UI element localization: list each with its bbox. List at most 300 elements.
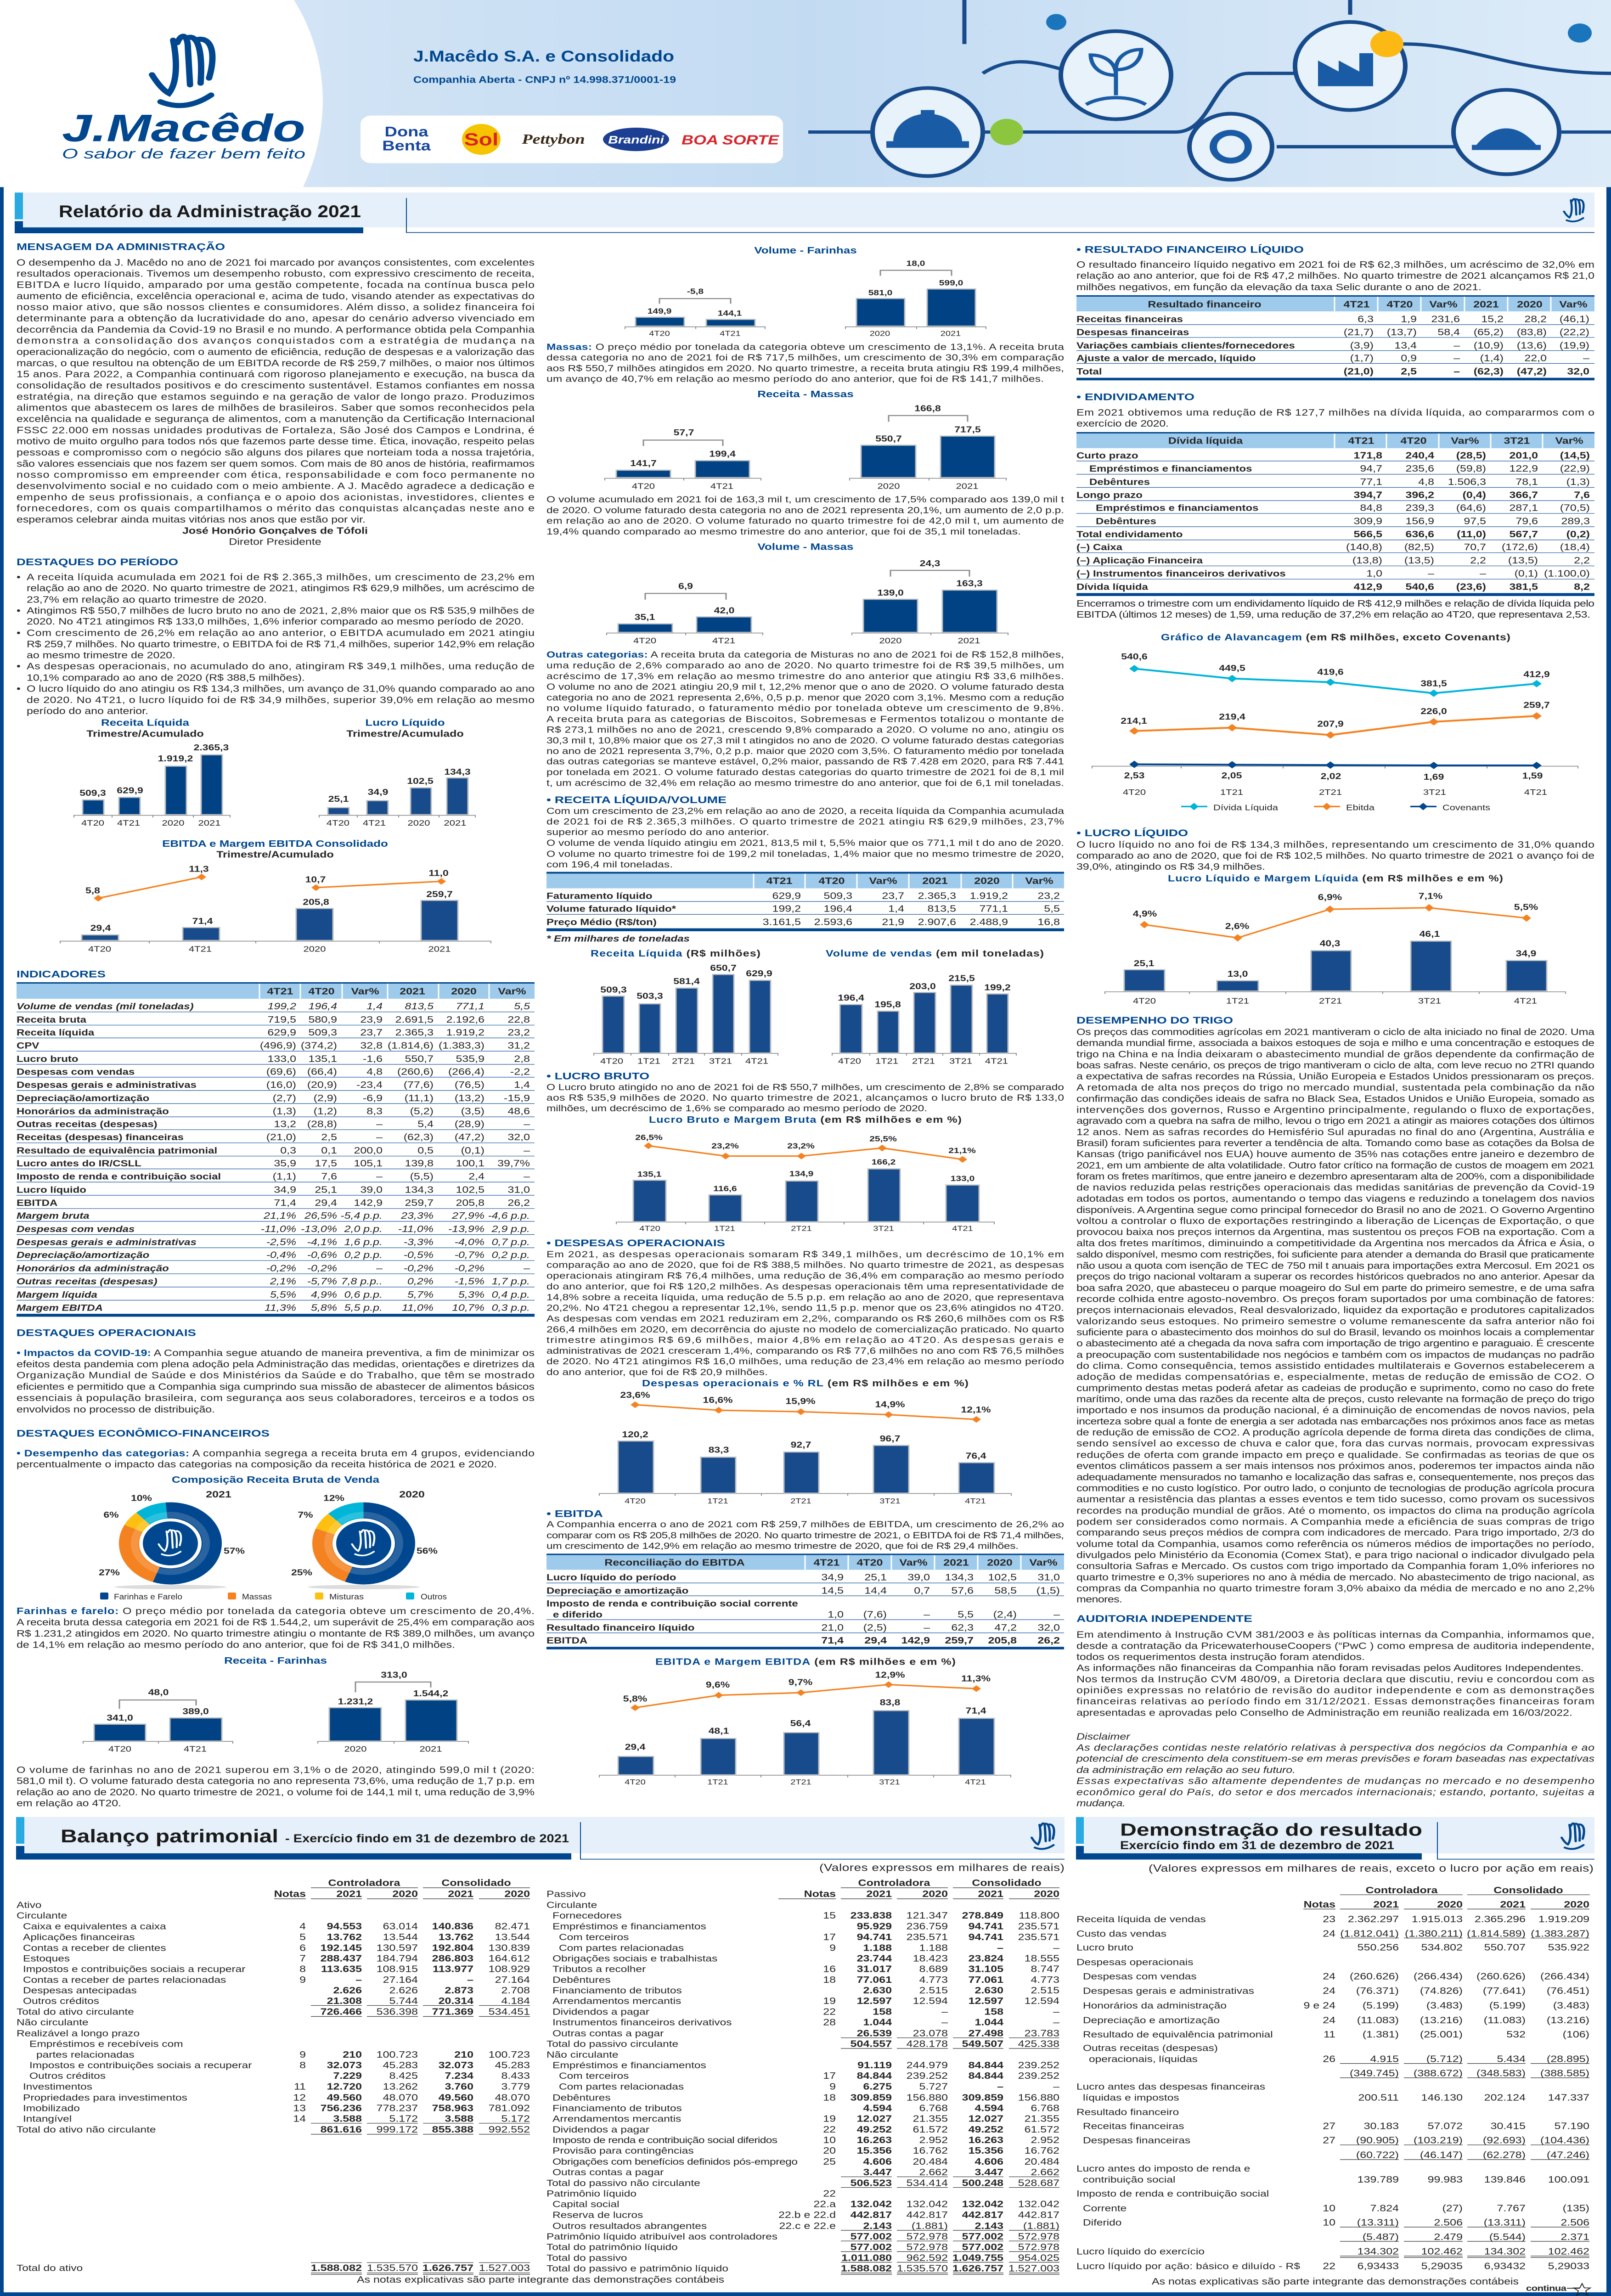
table: passivo: – (997, 1943, 1003, 1953)
chart: receita líquida trimestral: 581,4 (673, 977, 700, 986)
table: DRE: (74.826) (1420, 1986, 1463, 1996)
table: dívida líquida: (13,5) (1508, 555, 1538, 565)
table: ativo: 192.145 (321, 1943, 362, 1953)
text block: trigo: Kansas (trigo panificável nos EUA) houve aumento de 35% nas cotações entre janeiro e dezembro de (1076, 1149, 1594, 1159)
chart: receita líquida trimestral: Receita Líquida (R$ milhões) (591, 948, 760, 958)
table: passivo: 2020 (1034, 1889, 1059, 1899)
table: DRE: 2.365.296 (1475, 1914, 1526, 1925)
table: DRE: 2.479 (1434, 2232, 1463, 2242)
table: reconciliação do EBITDA: 5,5 (958, 1609, 974, 1620)
table: indicadores: 0,2% (407, 1276, 434, 1287)
table: indicadores: Resultado de equivalência patrimonial (17, 1145, 217, 1155)
chart: lucro líquido (319, 717, 475, 827)
chart: despesas operacionais e % RL: 4T21 (965, 1497, 986, 1505)
text block: outras categorias: por tonelada em 2021. O volume faturado destas categorias do quarto trimestre de 2021 foi de 8,1 mil (546, 767, 1064, 777)
chart: receita líquida: 2.365,3 (194, 743, 229, 753)
chart: receita líquida trimestral: 3T21 (709, 1057, 732, 1066)
table: DRE: (5.487) (1363, 2232, 1399, 2242)
table: dívida líquida: 171,8 (1353, 450, 1382, 461)
table: ativo: 32.073 (327, 2060, 362, 2070)
table: passivo: 94.741 (969, 1932, 1003, 1942)
table: passivo: 425.338 (1018, 2039, 1059, 2049)
chart: receita massas ano: 2021 (956, 482, 978, 491)
table: DRE: 30.183 (1364, 2121, 1399, 2131)
text block: trigo: commodities e no custo logístico. Por outro lado, o conjunto de tecnologias de produção agrícola procura (1076, 1483, 1594, 1493)
chart: volume farinhas ano: 581,0 (868, 289, 892, 297)
table: resultado financeiro: Var% (1429, 299, 1458, 310)
table: passivo: 4.606 (974, 2156, 1003, 2167)
table: passivo: 12.594 (1025, 1996, 1059, 2006)
table: ativo: 9 (299, 2049, 306, 2060)
table: dívida líquida: (23,6) (1456, 582, 1486, 592)
chart: despesas operacionais e % RL: 92,7 (791, 1441, 811, 1450)
table: indicadores: 17,5 (315, 1158, 337, 1168)
table: ativo: Investimentos (23, 2082, 92, 2092)
text block: trigo: aumentar a resistência das plantas a esses eventos e tem tido sucesso, como provam os sucessivos (1076, 1494, 1594, 1504)
table: indicadores: -6,9 (363, 1093, 383, 1103)
table: passivo: Total do passivo e patrimônio líquido (546, 2263, 728, 2273)
table: resultado financeiro (1076, 295, 1594, 380)
table: ativo: 63.014 (383, 1921, 418, 1931)
legend: composição: Massas (242, 1593, 272, 1602)
text block: lucro líquido (1076, 839, 1594, 872)
brand logos strip: Sol (464, 130, 498, 149)
table: indicadores: 4T20 (309, 986, 334, 996)
table: passivo: Arrendamentos mercantis (552, 2114, 681, 2124)
table: DRE: (266.434) (1540, 1971, 1589, 1981)
table: ativo: 82.471 (495, 1921, 530, 1931)
text block: trigo: comparando seus preços médios de compra com indicadores de mercado. Para trigo importado, 2/3 do (1076, 1528, 1594, 1538)
table: dívida líquida: 2,2 (1470, 555, 1486, 565)
table: reconciliação do EBITDA: 102,5 (988, 1572, 1017, 1582)
text block: trigo: 2021, em um ambiente de alta volatilidade. Outro fator crítico na formação de custos de moagem em 2021 (1076, 1160, 1594, 1171)
chart: volume massas 4T: 4T21 (712, 636, 735, 645)
table: passivo: 528.687 (1018, 2178, 1059, 2188)
table: resultado financeiro: – (1453, 366, 1460, 377)
table: DRE: 7.824 (1370, 2203, 1399, 2213)
text block: trigo: saldo disponível, mesmo com restrições, foi suficiente para atender a demanda do Brasil que praticamente (1076, 1249, 1594, 1260)
heading: auditoria independente: AUDITORIA INDEPENDENTE (1076, 1613, 1252, 1624)
table: reconciliação do EBITDA: 25,1 (864, 1572, 887, 1582)
table: DRE: (260.626) (1476, 1971, 1526, 1981)
table: passivo: Debêntures (552, 1975, 611, 1985)
text block: auditoria: opiniões expressas no relatório de revisão do auditor independente e com as demonstrações (1076, 1685, 1594, 1695)
company title: J.Macêdo S.A. e Consolidado (413, 48, 674, 65)
table: passivo: 1.044 (863, 2017, 892, 2027)
table: indicadores: 5,5 (514, 1001, 530, 1011)
text block: volume de farinhas (17, 1765, 535, 1808)
table: ativo: 100.723 (377, 2049, 418, 2060)
table: reconciliação do EBITDA: 29,4 (864, 1635, 887, 1645)
table: ativo: 3.760 (445, 2082, 473, 2092)
table: passivo: 9 (829, 2082, 836, 2092)
text block: outras categorias: no volume líquido faturado, o faturamento médio por tonelada obteve um crescimento de 9,8%. (546, 703, 1064, 713)
text block: trigo: recorde colhida entre agosto-novembro. Os preços foram suportados por uma combinação de fatores: (1076, 1294, 1594, 1304)
network illustration (808, 0, 1611, 180)
table: indicadores: (1,2) (314, 1106, 337, 1116)
table: passivo: 23.783 (1025, 2028, 1059, 2038)
table: DRE: (388.672) (1414, 2068, 1463, 2078)
text block: mensagem: esperamos celebrar ainda muitas vitórias nos anos que estão por vir. (17, 514, 366, 524)
table: indicadores: 0,5 (417, 1145, 434, 1155)
table: indicadores: -11,0% (261, 1224, 296, 1234)
table: indicadores: 1,7 p.p. (492, 1276, 530, 1287)
table: indicadores: Receita líquida (17, 1027, 95, 1037)
table: DRE: Despesas financeiras (1083, 2135, 1190, 2145)
chart: lucro bruto e margem bruta: 26,5% (635, 1133, 663, 1142)
chart: receita líquida trimestral: 4T20 (600, 1057, 623, 1066)
table: ativo: 11 (294, 2082, 306, 2092)
table: passivo: 2021 (978, 1889, 1003, 1899)
table: indicadores: 200,0 (354, 1145, 383, 1155)
table: passivo: 577.002 (851, 2231, 892, 2241)
table: DRE: Lucro líquido por ação: básico e diluído - R$ (1076, 2261, 1300, 2271)
table: DRE: 146.130 (1421, 2093, 1463, 2103)
table: dívida líquida: 8,2 (1574, 582, 1590, 592)
table: reconciliação do EBITDA: (2,4) (993, 1609, 1017, 1620)
table: indicadores: Lucro antes do IR/CSLL (17, 1158, 141, 1168)
table: passivo: 954.025 (1018, 2253, 1059, 2263)
table: indicadores: (76,5) (455, 1080, 484, 1090)
chart: receita líquida: 2020 (162, 819, 184, 827)
table: passivo: 4.606 (863, 2156, 892, 2167)
text block: despesas operacionais: trimestre atingimos R$ 69,6 milhões, maior 4,8% em relação ao 4T20. As despesas gerais e (546, 1335, 1064, 1345)
table: dívida líquida: Empréstimos e financiamentos (1089, 464, 1252, 474)
text block: mensagem: operacionalização do negócio, com o aumento de eficiência, redução de despesas e a valorização das (17, 347, 535, 357)
chart: alavancagem: Gráfico de Alavancagem (em R$ milhões, exceto Covenants) (1161, 632, 1510, 642)
table: dívida líquida (1076, 432, 1594, 596)
chart: EBITDA e margem consolidado: 10,7 (305, 875, 326, 884)
legend: composição (100, 1593, 447, 1602)
table: DRE: 7.767 (1497, 2203, 1526, 2213)
table: indicadores: (496,9) (260, 1041, 296, 1051)
table: DRE: 2.371 (1560, 2232, 1589, 2242)
table: DRE: (5.199) (1489, 2000, 1526, 2010)
table: indicadores: 71,4 (274, 1198, 296, 1208)
table: indicadores: 10,7% (452, 1303, 484, 1313)
table: passivo: 2.662 (1031, 2167, 1059, 2178)
table: dívida líquida: 540,6 (1405, 582, 1434, 592)
table: ativo: Total do ativo (17, 2263, 83, 2273)
text block: trigo: intervenções dos governos, Russo e Argentino principalmente, regulando o fluxo de exportações, (1076, 1105, 1594, 1115)
text block: outras categorias: A receita bruta para as categorias de Biscoitos, Sobremesas e Fermentos totalizou o montante de (546, 714, 1064, 724)
table: resultado financeiro: – (1583, 353, 1589, 363)
table: indicadores: Var% (498, 986, 526, 996)
table: passivo: 49.252 (857, 2124, 892, 2134)
table: indicadores: 8,3 (366, 1106, 383, 1116)
table: indicadores: 1,6 p.p. (344, 1237, 383, 1247)
table: indicadores: (1,3) (273, 1106, 296, 1116)
table: DRE: 2020 (1564, 1900, 1589, 1910)
table: DRE: 57.190 (1555, 2121, 1589, 2131)
table: indicadores: (5,5) (410, 1171, 434, 1182)
table: resultado financeiro: (19,9) (1560, 340, 1589, 350)
table: DRE: 102.462 (1548, 2246, 1589, 2257)
text block: endividamento (1076, 407, 1594, 428)
table: reconciliação do EBITDA: 71,4 (821, 1635, 844, 1645)
table: passivo: Com partes relacionadas (559, 2082, 684, 2092)
table: receita líquida/volume: 4T20 (819, 876, 845, 886)
table: indicadores: (13,2) (455, 1093, 484, 1103)
text block: trigo (1076, 1027, 1595, 1604)
table: resultado financeiro: – (1453, 340, 1460, 350)
table: passivo: Com partes relacionadas (559, 1943, 684, 1953)
table: passivo: 16.762 (913, 2145, 948, 2156)
table: indicadores: Outras receitas (despesas) (17, 1119, 158, 1129)
text block: despesas operacionais: 20,2%. No 4T21 chegou a representar 12,1%, sendo 11,5 p.p. menor que os 23,6% atingidos no 4T20. (546, 1303, 1064, 1313)
table: DRE: 99.983 (1428, 2175, 1463, 2185)
heading: lucro líquido: • LUCRO LÍQUIDO (1076, 827, 1188, 838)
text block: trigo: Os preços das commodities agrícolas em 2021 mantiveram o ciclo de alta iniciado no final de 2020. Uma (1076, 1027, 1594, 1037)
chart: EBITDA e margem EBITDA: 4T20 (625, 1778, 646, 1786)
brand logos strip: Brandini (608, 133, 664, 146)
brand logos strip: Benta (382, 138, 431, 154)
table: passivo: 22 (823, 2007, 836, 2017)
chart: EBITDA e margem EBITDA: 9,7% (789, 1677, 812, 1687)
table: ativo: 6 (299, 1943, 306, 1953)
chart: volume de vendas: 203,0 (909, 982, 936, 991)
table: reconciliação do EBITDA: 2021 (943, 1558, 969, 1568)
table: indicadores: Honorários da administração (17, 1106, 169, 1116)
table: indicadores: 23,9 (360, 1014, 383, 1024)
company subtitle: Companhia Aberta - CNPJ nº 14.998.371/0001-19 (413, 74, 676, 85)
table: resultado financeiro: (3,9) (1350, 340, 1374, 350)
legend: composição: Farinhas e Farelo (114, 1593, 182, 1602)
chart: despesas operacionais e % RL: Despesas operacionais e % RL (em R$ milhões e em %) (642, 1379, 969, 1389)
table: ativo: 2.626 (389, 1985, 418, 1995)
table: reconciliação do EBITDA: Imposto de renda e contribuição social corrente (546, 1598, 798, 1609)
chart title: composição: Composição Receita Bruta de Venda (172, 1474, 380, 1485)
table: reconciliação do EBITDA: 57,6 (951, 1586, 974, 1596)
chart: lucro bruto e margem bruta: 4T21 (952, 1224, 973, 1232)
text block: despesas operacionais (546, 1249, 1065, 1377)
chart: EBITDA e margem consolidado: 259,7 (426, 890, 453, 899)
chart: receita líquida trimestral: 509,3 (600, 985, 627, 995)
text block: trigo: alta dos fretes marítimos, diminuindo a competitividade da Argentina nos mercados da África e Ásia, o (1076, 1238, 1594, 1248)
table: passivo: 235.571 (907, 1932, 948, 1942)
table: ativo: 2.626 (333, 1985, 362, 1995)
text block: trigo: menores. (1076, 1594, 1122, 1604)
text block: trigo: boas safras. Neste cenário, os preços de trigo mantiveram o ciclo de alta, com leve recuo no 2TRI quando (1076, 1060, 1594, 1070)
table: DRE: (1.383.287) (1531, 1929, 1589, 1939)
table: indicadores: -23,4 (356, 1080, 383, 1090)
table: passivo: 2.630 (974, 1985, 1003, 1995)
table: passivo: Outras contas a pagar (552, 2028, 664, 2038)
table: receita líquida/volume: Preço Médio (R$/ton) (546, 917, 657, 927)
table: indicadores: 550,7 (405, 1054, 434, 1064)
panel: right column (1076, 244, 1595, 1808)
chart: alavancagem: 219,4 (1219, 712, 1245, 722)
text block: despesas operacionais: do ano anterior, que foi de R$ 20,9 milhões. (546, 1367, 768, 1377)
table: ativo: 534.451 (489, 2007, 530, 2017)
table: indicadores: -0,2% (455, 1263, 484, 1273)
table: passivo: – (1053, 2007, 1059, 2017)
table: receita líquida/volume: 2.365,3 (918, 891, 956, 901)
table: indicadores: (69,6) (266, 1067, 296, 1077)
table: reconciliação do EBITDA: Var% (1029, 1558, 1058, 1568)
heading: desempenho do trigo: DESEMPENHO DO TRIGO (1076, 1015, 1233, 1026)
company logo: J.Macêdo (62, 107, 305, 149)
text block: auditoria (1076, 1630, 1594, 1718)
brand logos strip: Pettybon (521, 132, 585, 147)
table: indicadores: (66,4) (307, 1067, 337, 1077)
chart: lucro bruto e margem bruta: 4T20 (639, 1224, 660, 1232)
chart: lucro líquido e margem líquida: 5,5% (1514, 903, 1538, 912)
table: passivo: (1.881) (912, 2221, 948, 2231)
table: indicadores: 34,9 (274, 1185, 296, 1195)
text block: mensagem: Diretor Presidente (229, 537, 321, 547)
table: indicadores: 0,2 p.p. (344, 1250, 383, 1260)
table: ativo: 286.803 (432, 1953, 473, 1964)
table: indicadores: 5,3% (458, 1289, 484, 1300)
table: indicadores: -2,2 (510, 1067, 530, 1077)
table: passivo: 23.078 (913, 2028, 948, 2038)
chart: receita líquida trimestral: 2T21 (672, 1057, 695, 1066)
table: resultado financeiro: 4T21 (1344, 299, 1369, 310)
table: ativo: 2.873 (445, 1985, 473, 1995)
table: resultado financeiro: 4T20 (1387, 299, 1413, 310)
table: indicadores: Margem bruta (17, 1211, 90, 1221)
table: resultado financeiro: (21,0) (1344, 366, 1374, 377)
table: ativo: 2.708 (501, 1985, 530, 1995)
text block: massas: Massas: O preço médio por tonelada da categoria obteve um crescimento de 13,1%. A receita bruta (546, 342, 1065, 352)
table: passivo: 158 (873, 2007, 892, 2017)
donut chart: 2020: 56% (417, 1546, 438, 1556)
table: resultado financeiro: (1,7) (1350, 353, 1374, 363)
table: passivo: 2021 (866, 1889, 892, 1899)
heading: receita líquida/volume: • RECEITA LÍQUIDA/VOLUME (546, 794, 727, 805)
table: dívida líquida: 309,9 (1353, 516, 1382, 526)
table: indicadores: 205,8 (456, 1198, 484, 1208)
text block: trigo: volume total da Companhia, usamos como referência os números médios de importações no período, (1076, 1539, 1594, 1549)
table: reconciliação do EBITDA: 0,7 (914, 1586, 930, 1596)
table: dívida líquida: (13,5) (1404, 555, 1434, 565)
text block: mensagem: pessoas e compromisso com o negócio são alguns dos pilares que norteiam toda a nossa trajetória, (17, 447, 535, 457)
table: dívida líquida: 366,7 (1509, 490, 1538, 500)
table: DRE: 100.091 (1548, 2175, 1589, 2185)
chart: receita massas 4T: 4T21 (710, 482, 733, 491)
table: DRE: 57.072 (1428, 2121, 1463, 2131)
chart title: receita farinhas: Receita - Farinhas (224, 1655, 327, 1666)
table: indicadores: 100,1 (456, 1158, 484, 1168)
chart: EBITDA e margem EBITDA: 9,6% (706, 1680, 730, 1689)
table: resultado financeiro: 22,0 (1524, 353, 1547, 363)
table: resultado financeiro: (1,4) (1480, 353, 1504, 363)
table: indicadores (17, 982, 535, 1317)
table: receita líquida/volume: 2021 (922, 876, 948, 886)
table: ativo: 5.172 (389, 2114, 418, 2124)
chart: lucro bruto e margem bruta: 2T21 (791, 1224, 812, 1232)
text block: trigo: cumprimento destas metas poderá afetar as cadeias de produção e suprimento, como no caso do frete (1076, 1383, 1594, 1393)
table: passivo: 132.042 (962, 2199, 1003, 2209)
table: ativo: 1.527.003 (479, 2263, 530, 2273)
chart: volume farinhas 4T (625, 287, 765, 338)
table: passivo: 91.119 (857, 2060, 892, 2070)
chart title: volume massas: Volume - Massas (758, 541, 853, 552)
table: DRE: 26 (1323, 2054, 1335, 2064)
table: indicadores: EBITDA (17, 1198, 58, 1208)
donut chart: 2020 (291, 1490, 438, 1589)
text block: destaques: • (17, 628, 21, 638)
text block: destaques: relação ao ano de 2020. No quarto trimestre de 2021, atingimos R$ 629,9 milhões, um acréscimo de (27, 583, 535, 593)
table: indicadores: -0,2% (307, 1263, 337, 1273)
table: indicadores: (11,1) (405, 1093, 434, 1103)
text block: auditoria: Em atendimento à Instrução CVM 381/2003 e às políticas internas da Companhia, informamos que, (1076, 1630, 1594, 1640)
chart: lucro bruto e margem bruta: 166,2 (872, 1158, 896, 1166)
table: ativo: 861.616 (321, 2124, 362, 2134)
table: passivo: 534.414 (907, 2178, 948, 2188)
table: DRE: 147.337 (1548, 2093, 1589, 2103)
table: indicadores: (28,8) (307, 1119, 337, 1129)
table: indicadores: 27,9% (451, 1211, 484, 1221)
banner: demonstração: Demonstração do resultado (1120, 1820, 1422, 1840)
text block: trigo: eventos climáticos passem a ser mais intensos nos próximos anos, poderemos ter impactos ainda não (1076, 1461, 1594, 1471)
table: dívida líquida: Empréstimos e financiamentos (1096, 503, 1259, 513)
table: ativo: 164.612 (489, 1953, 530, 1964)
table: indicadores: Receita bruta (17, 1014, 87, 1024)
table: ativo: 1.588.082 (311, 2263, 362, 2273)
chart: alavancagem: 449,5 (1219, 664, 1245, 673)
table: dívida líquida: 84,8 (1360, 503, 1382, 513)
donut chart: 2021: 6% (103, 1510, 119, 1520)
table: indicadores: 813,5 (405, 1001, 434, 1011)
table: indicadores: 5,4 (417, 1119, 434, 1129)
table: passivo: Empréstimos e financiamentos (552, 1921, 706, 1931)
table: passivo: 1.044 (974, 2017, 1003, 2027)
table: DRE: 10 (1323, 2203, 1335, 2213)
chart: lucro bruto e margem bruta: 1T21 (714, 1224, 735, 1232)
table: DRE: líquidas e impostos (1083, 2093, 1179, 2103)
table: reconciliação do EBITDA: Resultado financeiro líquido (546, 1622, 694, 1633)
table: dívida líquida: Dívida líquida (1076, 582, 1149, 592)
chart: alavancagem: 214,1 (1121, 716, 1147, 726)
banner: demonstração: Exercício findo em 31 de dezembro de 2021 (1120, 1839, 1394, 1851)
table: passivo: 2.143 (974, 2221, 1003, 2231)
table: passivo: Patrimônio líquido atribuível aos controladores (546, 2231, 777, 2241)
company logo (62, 36, 305, 162)
text block: auditoria: As informações não financeiras da Companhia não foram revisadas pelos Auditores Independentes. (1076, 1663, 1584, 1673)
table: DRE: (13.216) (1547, 2015, 1589, 2025)
panel: balanço patrimonial (16, 1817, 1065, 2285)
table: indicadores: -5,7% (307, 1276, 337, 1287)
brand logos strip: BOA SORTE (682, 133, 779, 147)
table: ativo: 100.723 (489, 2049, 530, 2060)
table: indicadores: 0,2 p.p. (492, 1250, 530, 1260)
table: indicadores: – (376, 1132, 383, 1142)
chart: EBITDA e margem consolidado: 4T20 (88, 945, 111, 954)
text block: outras categorias: uma redução de 2,6% comparado ao ano de 2020. No quarto trimestre foi de R$ 39,5 milhões, um (546, 660, 1064, 670)
chart: volume farinhas 4T: 4T20 (649, 330, 670, 338)
text block: trigo: podem ser considerados como normais. A Companhia mede a eficiência de suas compras de trigo (1076, 1517, 1594, 1527)
chart: volume farinhas 4T: 144,1 (718, 310, 742, 318)
table: resultado financeiro: (22,2) (1560, 327, 1589, 337)
table: ativo: 3.779 (501, 2082, 530, 2092)
table: receita líquida/volume: Var% (1025, 876, 1053, 886)
table: ativo: 210 (454, 2049, 473, 2060)
table: dívida líquida: 201,0 (1509, 450, 1538, 461)
chart: receita massas 4T: 199,4 (709, 450, 736, 459)
table: indicadores: 5,7% (407, 1289, 434, 1300)
table: indicadores: 32,8 (360, 1041, 383, 1051)
text block: mensagem: determinante para a obtenção da lucratividade do ano, apesar do cenário adverso vivenciado em (17, 313, 535, 323)
chart: receita líquida trimestral: 1T21 (637, 1057, 660, 1066)
table: indicadores: 35,9 (274, 1158, 296, 1168)
chart: volume massas ano: 163,3 (956, 579, 983, 588)
table: passivo: Total do passivo não circulante (546, 2178, 700, 2188)
chart: despesas operacionais e % RL: 83,3 (709, 1446, 729, 1455)
table: indicadores: Honorários da administração (17, 1263, 169, 1273)
heading: despesas operacionais: • DESPESAS OPERACIONAIS (546, 1238, 725, 1249)
